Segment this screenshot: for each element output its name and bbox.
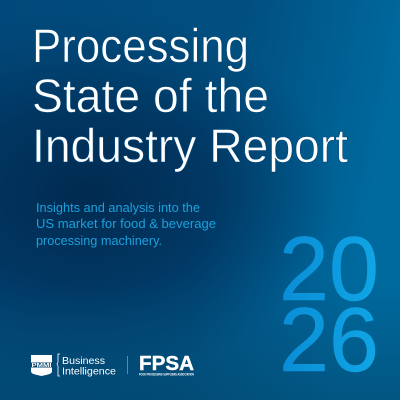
business intelligence wordmark: Intelligence bbox=[62, 366, 116, 378]
logo: FPSA: FPSA bbox=[139, 353, 194, 375]
subtitle: processing machinery. bbox=[36, 233, 162, 248]
title bbox=[32, 19, 348, 172]
title: Industry Report bbox=[32, 119, 348, 172]
bracket bbox=[57, 354, 60, 376]
subtitle bbox=[36, 200, 216, 248]
business intelligence wordmark: Business bbox=[62, 355, 105, 367]
subtitle: US market for food & beverage bbox=[36, 216, 216, 231]
year 2026: 20 bbox=[279, 219, 379, 320]
year 2026: 26 bbox=[279, 290, 379, 391]
business intelligence wordmark bbox=[62, 355, 116, 378]
year 2026 bbox=[279, 219, 379, 391]
logo: PMMI Business Intelligence bbox=[31, 354, 116, 378]
title: State of the bbox=[32, 69, 269, 122]
divider bbox=[126, 356, 129, 374]
title: Processing bbox=[32, 19, 249, 72]
subtitle: Insights and analysis into the bbox=[36, 200, 200, 215]
icon: PMMI shield: PMMI bbox=[32, 363, 52, 369]
logo: FPSA: FOOD PROCESSING SUPPLIERS ASSOCIATION bbox=[139, 372, 194, 376]
